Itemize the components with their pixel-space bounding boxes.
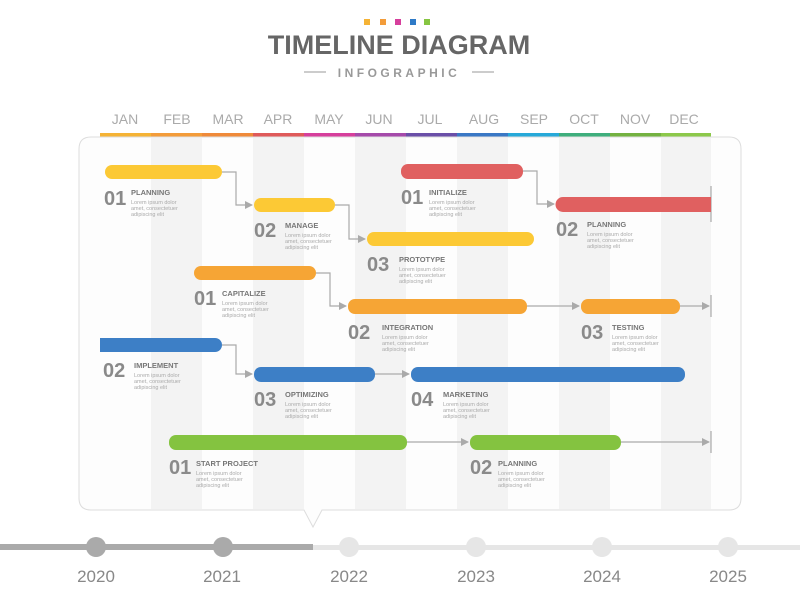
year timeline: 2025 <box>709 567 747 586</box>
labels: PROTOTYPE <box>399 255 445 264</box>
year timeline: 2020 <box>77 567 115 586</box>
labels: amet, consectetuer <box>222 307 269 313</box>
year timeline: 2022 <box>330 567 368 586</box>
connectors <box>222 171 711 453</box>
month labels: FEB <box>163 111 191 127</box>
labels: OPTIMIZING <box>285 390 329 399</box>
labels: adipiscing elit <box>587 244 620 250</box>
labels: 02 <box>470 457 492 479</box>
labels: Lorem ipsum dolor <box>285 233 331 239</box>
labels: INITIALIZE <box>429 188 467 197</box>
labels: Lorem ipsum dolor <box>134 373 180 379</box>
labels: amet, consectetuer <box>131 206 178 212</box>
labels: adipiscing elit <box>285 414 318 420</box>
labels: amet, consectetuer <box>196 477 243 483</box>
month labels: OCT <box>569 111 599 127</box>
month color bar <box>100 133 711 137</box>
labels: adipiscing elit <box>382 347 415 353</box>
labels: PLANNING <box>498 459 537 468</box>
labels: MANAGE <box>285 221 318 230</box>
labels: amet, consectetuer <box>612 341 659 347</box>
labels: amet, consectetuer <box>443 408 490 414</box>
labels: amet, consectetuer <box>134 379 181 385</box>
month labels: APR <box>264 111 292 127</box>
year timeline: 2021 <box>203 567 241 586</box>
labels: adipiscing elit <box>429 212 462 218</box>
month labels: JUN <box>365 111 393 127</box>
labels: amet, consectetuer <box>587 238 634 244</box>
labels: amet, consectetuer <box>382 341 429 347</box>
month labels: JAN <box>112 111 138 127</box>
labels: Lorem ipsum dolor <box>429 200 475 206</box>
month labels: NOV <box>620 111 651 127</box>
labels: Lorem ipsum dolor <box>399 267 445 273</box>
labels: MARKETING <box>443 390 489 399</box>
labels: 03 <box>581 322 603 344</box>
labels: IMPLEMENT <box>134 361 179 370</box>
labels: amet, consectetuer <box>399 273 446 279</box>
bars <box>100 164 711 450</box>
labels: adipiscing elit <box>443 414 476 420</box>
labels: Lorem ipsum dolor <box>196 471 242 477</box>
month labels: JUL <box>418 111 443 127</box>
labels: amet, consectetuer <box>498 477 545 483</box>
month labels: SEP <box>520 111 548 127</box>
labels: adipiscing elit <box>222 313 255 319</box>
labels: PLANNING <box>587 220 626 229</box>
labels <box>103 187 659 489</box>
labels: 02 <box>556 219 578 241</box>
labels: 02 <box>254 220 276 242</box>
month labels: MAR <box>212 111 244 127</box>
labels: adipiscing elit <box>285 245 318 251</box>
labels: adipiscing elit <box>399 279 432 285</box>
panel <box>79 137 741 527</box>
labels: Lorem ipsum dolor <box>498 471 544 477</box>
labels: 01 <box>104 188 126 210</box>
labels: START PROJECT <box>196 459 258 468</box>
labels: Lorem ipsum dolor <box>612 335 658 341</box>
labels: INTEGRATION <box>382 323 433 332</box>
labels: adipiscing elit <box>134 385 167 391</box>
month labels: AUG <box>469 111 499 127</box>
year timeline: 2024 <box>583 567 621 586</box>
labels: PLANNING <box>131 188 170 197</box>
subtitle: INFOGRAPHIC <box>338 66 460 80</box>
month labels: MAY <box>314 111 344 127</box>
title: TIMELINE DIAGRAM <box>268 30 530 60</box>
year timeline <box>0 537 800 586</box>
labels: Lorem ipsum dolor <box>222 301 268 307</box>
labels: CAPITALIZE <box>222 289 266 298</box>
month labels: DEC <box>669 111 699 127</box>
labels: adipiscing elit <box>612 347 645 353</box>
year timeline: 2023 <box>457 567 495 586</box>
labels: amet, consectetuer <box>285 408 332 414</box>
labels: 01 <box>401 187 423 209</box>
labels: adipiscing elit <box>131 212 164 218</box>
labels: 01 <box>169 457 191 479</box>
labels: 03 <box>254 389 276 411</box>
color squares <box>364 19 430 25</box>
labels: Lorem ipsum dolor <box>443 402 489 408</box>
labels: amet, consectetuer <box>285 239 332 245</box>
labels: 02 <box>348 322 370 344</box>
labels: amet, consectetuer <box>429 206 476 212</box>
labels: Lorem ipsum dolor <box>285 402 331 408</box>
labels: TESTING <box>612 323 645 332</box>
labels: adipiscing elit <box>196 483 229 489</box>
labels: adipiscing elit <box>498 483 531 489</box>
month labels <box>112 111 699 127</box>
labels: Lorem ipsum dolor <box>587 232 633 238</box>
labels: 01 <box>194 288 216 310</box>
labels: Lorem ipsum dolor <box>382 335 428 341</box>
labels: 03 <box>367 254 389 276</box>
labels: 04 <box>411 389 434 411</box>
labels: Lorem ipsum dolor <box>131 200 177 206</box>
labels: 02 <box>103 360 125 382</box>
